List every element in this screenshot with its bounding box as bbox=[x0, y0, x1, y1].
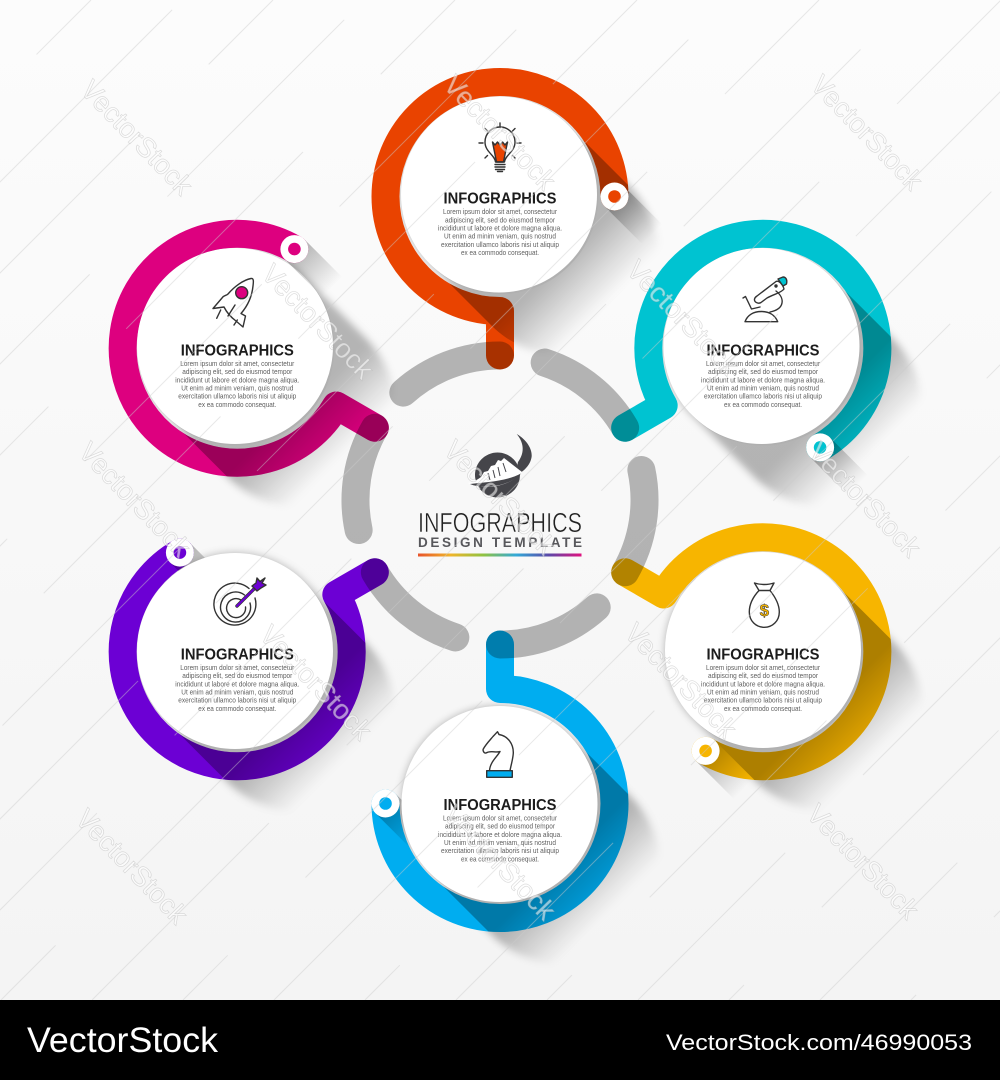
central logo bbox=[468, 434, 532, 498]
panel: upper left step bbox=[108, 220, 392, 504]
watermarks: VectorStock bbox=[801, 798, 925, 925]
text block: adipiscing elit, sed do eiusmod tempor bbox=[445, 822, 555, 831]
ring shading bbox=[235, 346, 297, 408]
watermarks: VectorStock bbox=[438, 799, 562, 926]
white circle bbox=[665, 552, 862, 750]
text block: INFOGRAPHICS bbox=[181, 342, 294, 359]
text block: Ut enim ad minim veniam, quis nostrud bbox=[181, 383, 293, 392]
text block: ex ea commodo consequat. bbox=[198, 704, 276, 713]
text block: Lorem ipsum dolor sit amet, consectetur bbox=[180, 663, 295, 672]
central title: INFOGRAPHICS bbox=[418, 507, 582, 538]
white circle bbox=[402, 706, 599, 904]
panel: lower left step bbox=[108, 538, 392, 808]
text block: exercitation ullamco laboris nisi ut aliquip bbox=[178, 392, 296, 401]
text block: Ut enim ad minim veniam, quis nostrud bbox=[444, 232, 556, 241]
text block: ex ea commodo consequat. bbox=[461, 248, 539, 257]
text block: adipiscing elit, sed do eiusmod tempor bbox=[445, 215, 555, 224]
ring shading bbox=[762, 346, 824, 408]
text block: Ut enim ad minim veniam, quis nostrud bbox=[181, 687, 293, 696]
dot shadow bbox=[294, 249, 332, 287]
watermarks: VectorStock bbox=[438, 434, 562, 561]
text block: Ut enim ad minim veniam, quis nostrud bbox=[707, 687, 819, 696]
text block: ex ea commodo consequat. bbox=[724, 400, 802, 409]
background shadow bbox=[763, 650, 825, 712]
white circle bbox=[401, 96, 598, 294]
text block: ex ea commodo consequat. bbox=[724, 704, 802, 713]
text block bbox=[175, 342, 299, 409]
panel: lower right step bbox=[611, 523, 920, 808]
ring shading bbox=[500, 804, 562, 866]
text block bbox=[438, 797, 562, 863]
text block: Lorem ipsum dolor sit amet, consectetur bbox=[443, 813, 557, 822]
watermarks: VectorStock bbox=[803, 436, 927, 563]
watermarks: VectorStock bbox=[254, 619, 378, 746]
text block: incididunt ut labore et dolore magna aliqua. bbox=[438, 830, 562, 839]
ring: blue bbox=[386, 644, 614, 918]
text block: exercitation ullamco laboris nisi ut aliquip bbox=[441, 240, 559, 249]
background shadow bbox=[235, 651, 297, 713]
footer brand: VectorStock bbox=[27, 1021, 219, 1060]
text block: Lorem ipsum dolor sit amet, consectetur bbox=[443, 207, 557, 216]
ring shading bbox=[499, 194, 561, 256]
ring: orange bbox=[386, 82, 614, 356]
background shadow bbox=[762, 346, 824, 408]
watermarks: VectorStock bbox=[621, 254, 745, 381]
footer image id: VectorStock.com/46990053 bbox=[666, 1030, 972, 1055]
text block: Ut enim ad minim veniam, quis nostrud bbox=[707, 383, 819, 392]
watermarks: VectorStock bbox=[75, 74, 199, 201]
text block: Lorem ipsum dolor sit amet, consectetur bbox=[706, 663, 820, 672]
text block: ex ea commodo consequat. bbox=[198, 400, 276, 409]
text block: exercitation ullamco laboris nisi ut aliquip bbox=[704, 696, 822, 705]
icon: target and dart bbox=[214, 578, 266, 625]
text block: Lorem ipsum dolor sit amet, consectetur bbox=[706, 359, 820, 368]
watermarks: VectorStock bbox=[619, 617, 743, 744]
text block: exercitation ullamco laboris nisi ut aliquip bbox=[441, 846, 559, 855]
central subtitle: DESIGN TEMPLATE bbox=[418, 535, 582, 550]
text block: INFOGRAPHICS bbox=[706, 646, 820, 663]
text block: INFOGRAPHICS bbox=[706, 342, 820, 359]
text block: adipiscing elit, sed do eiusmod tempor bbox=[182, 671, 293, 680]
text block: Lorem ipsum dolor sit amet, consectetur bbox=[180, 359, 295, 368]
icon: money bag: $ bbox=[760, 601, 770, 620]
central grey ring segments bbox=[327, 344, 673, 656]
footer bar bbox=[0, 1000, 1000, 1080]
text block: adipiscing elit, sed do eiusmod tempor bbox=[708, 671, 818, 680]
marker dot bbox=[600, 182, 628, 210]
dot shadow bbox=[820, 447, 858, 485]
white circle bbox=[137, 553, 334, 750]
watermarks: VectorStock bbox=[73, 436, 197, 563]
dot shadow bbox=[614, 196, 652, 234]
watermarks bbox=[70, 69, 929, 930]
text block: incididunt ut labore et dolore magna aliqua. bbox=[701, 679, 825, 688]
ring: purple bbox=[81, 473, 432, 808]
text block: adipiscing elit, sed do eiusmod tempor bbox=[182, 367, 293, 376]
text block: incididunt ut labore et dolore magna aliqua. bbox=[175, 679, 299, 688]
marker dot bbox=[280, 235, 308, 263]
text block bbox=[701, 646, 825, 713]
marker dot bbox=[166, 539, 194, 567]
ring: magenta bbox=[81, 192, 432, 527]
ring shading bbox=[235, 651, 297, 713]
text block bbox=[438, 190, 562, 257]
text block bbox=[701, 342, 825, 409]
text block: exercitation ullamco laboris nisi ut aliquip bbox=[704, 392, 822, 401]
icon: microscope bbox=[743, 277, 787, 322]
ring: yellow bbox=[568, 473, 919, 808]
ring shading bbox=[763, 650, 825, 712]
text block: INFOGRAPHICS bbox=[444, 797, 556, 814]
text block: INFOGRAPHICS bbox=[444, 190, 556, 208]
text block: incididunt ut labore et dolore magna aliqua. bbox=[175, 375, 299, 384]
text block: incididunt ut labore et dolore magna aliqua. bbox=[701, 375, 825, 384]
text block: exercitation ullamco laboris nisi ut aliquip bbox=[178, 696, 296, 705]
dot shadow bbox=[706, 751, 744, 789]
panel: top step bbox=[386, 82, 652, 356]
icon: rocket bbox=[213, 278, 253, 327]
background shadow bbox=[235, 346, 297, 408]
watermarks: VectorStock bbox=[805, 69, 929, 196]
text block: INFOGRAPHICS bbox=[181, 646, 294, 663]
dot shadow bbox=[386, 804, 424, 842]
panel: upper right step bbox=[611, 220, 919, 504]
watermarks: VectorStock bbox=[438, 69, 562, 196]
text block bbox=[175, 646, 299, 713]
panel: bottom step bbox=[372, 644, 614, 918]
text block: incididunt ut labore et dolore magna aliqua. bbox=[438, 224, 562, 232]
marker dot bbox=[372, 790, 400, 818]
icon: light bulb bbox=[479, 123, 521, 172]
watermarks: VectorStock bbox=[70, 803, 194, 930]
text block: adipiscing elit, sed do eiusmod tempor bbox=[708, 367, 818, 376]
ring: teal bbox=[568, 192, 919, 527]
icon: chess knight bbox=[483, 732, 513, 777]
marker dot bbox=[692, 737, 720, 765]
marker dot bbox=[806, 433, 834, 461]
icon: money bag bbox=[749, 583, 779, 627]
background shadow bbox=[500, 804, 562, 866]
dot shadow bbox=[180, 553, 218, 591]
white circle bbox=[137, 248, 334, 446]
rainbow underline bbox=[418, 554, 582, 556]
text block: Ut enim ad minim veniam, quis nostrud bbox=[444, 838, 556, 847]
watermarks: VectorStock bbox=[256, 258, 380, 385]
white circle bbox=[664, 248, 861, 446]
background shadow bbox=[499, 194, 561, 256]
text block: ex ea commodo consequat. bbox=[461, 854, 539, 863]
